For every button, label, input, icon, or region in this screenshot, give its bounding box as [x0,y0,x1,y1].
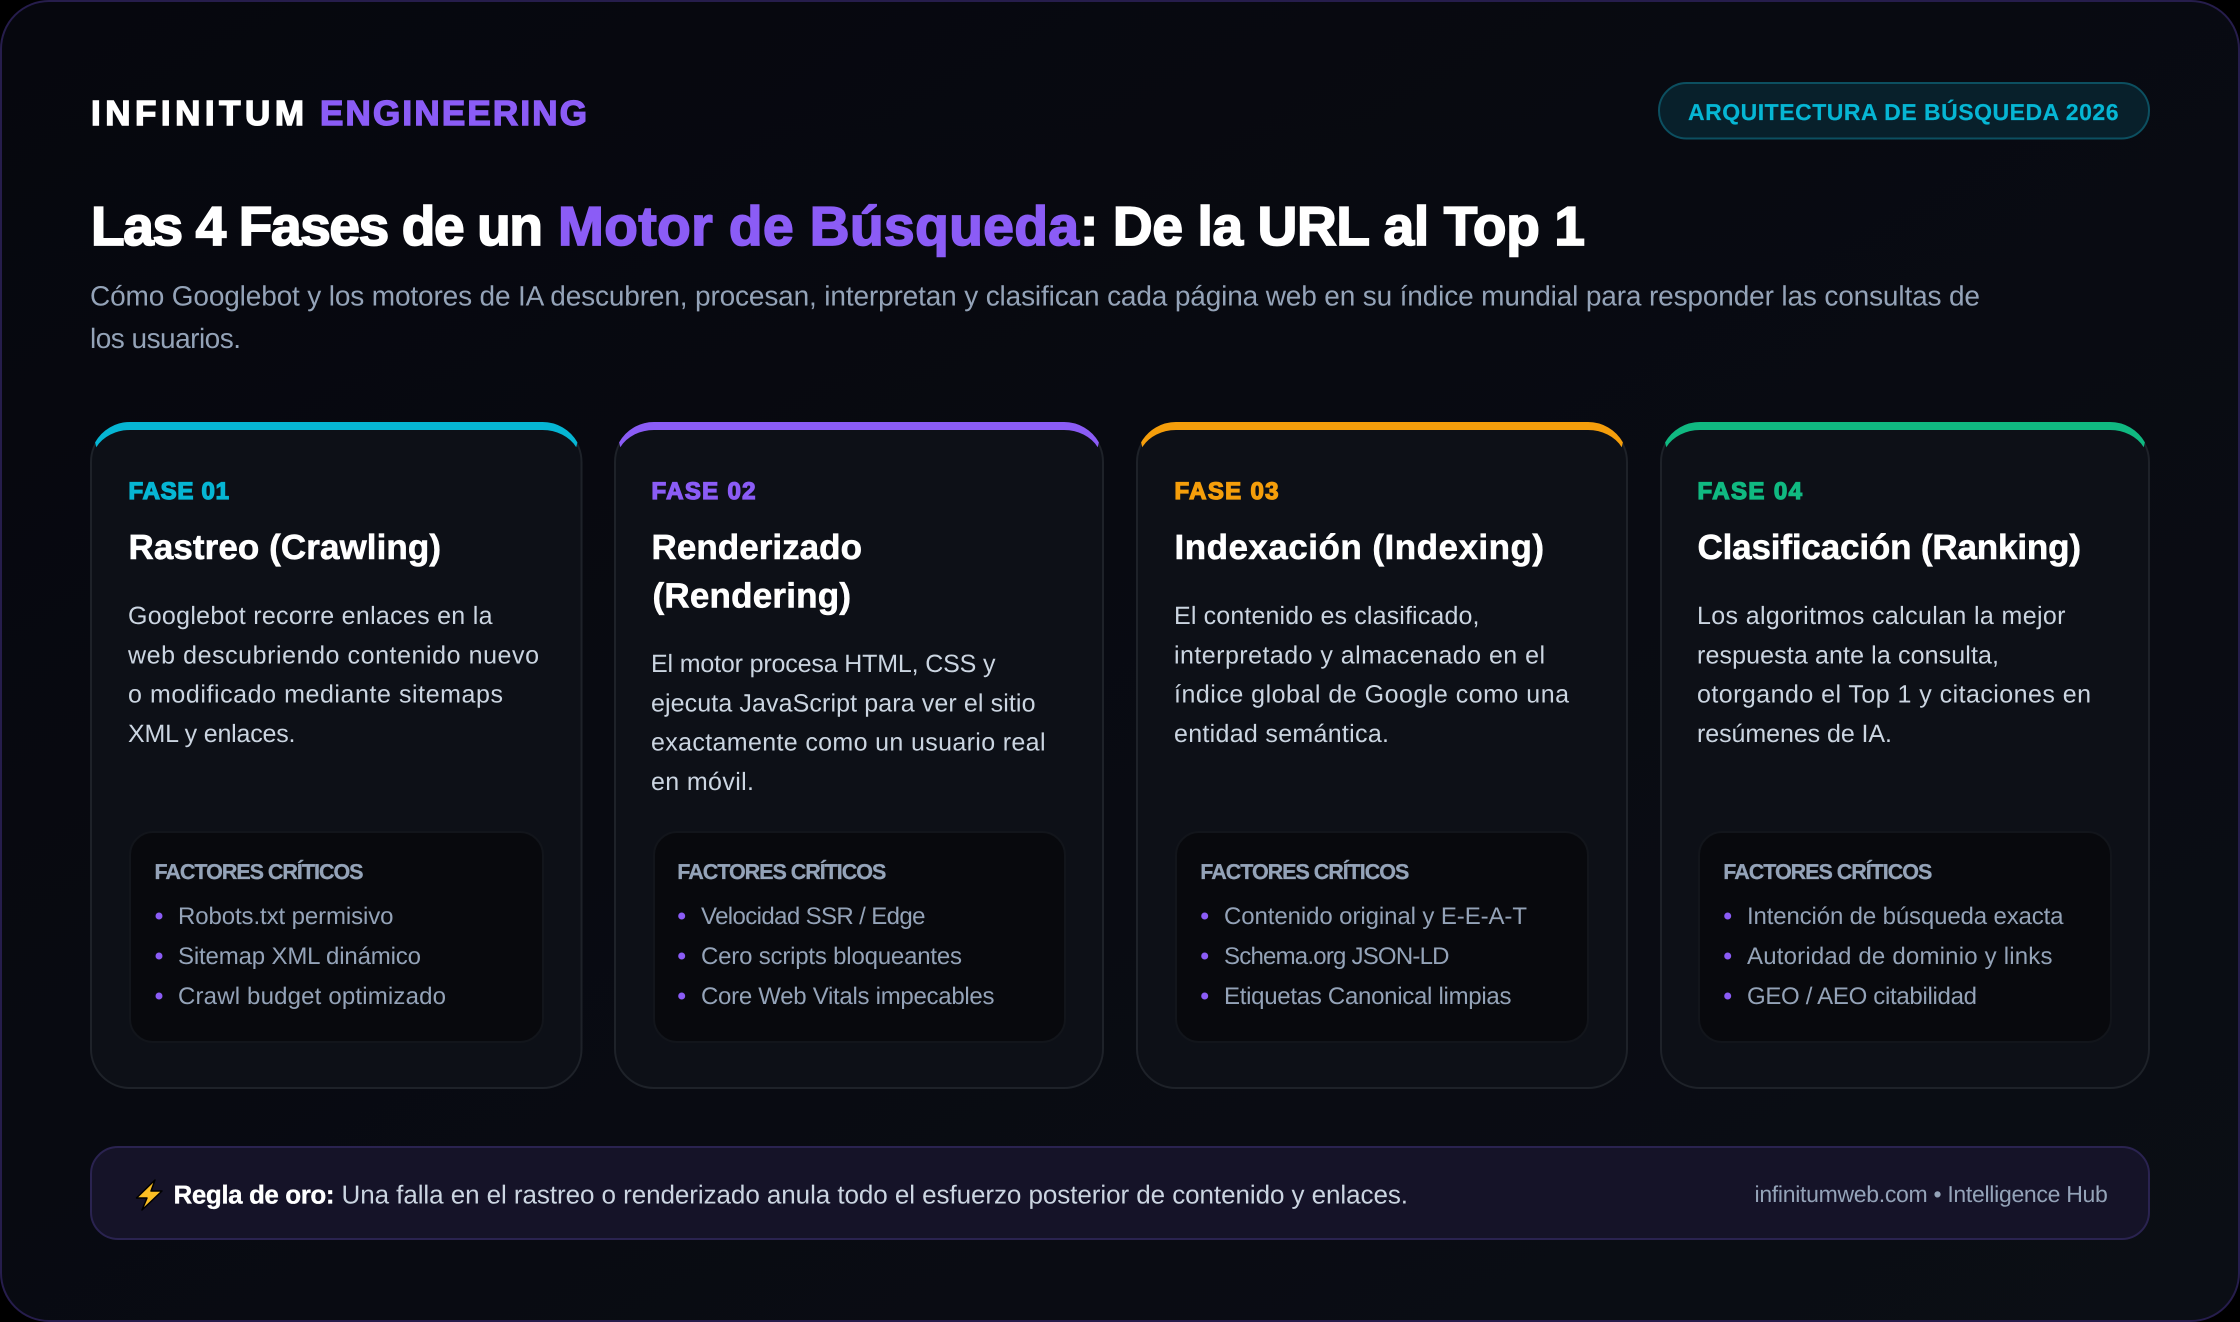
phase label: FASE 03 [1174,478,1281,505]
panel: fase 04 clasificacion [1661,422,2149,1088]
header brand: INFINITUM [91,94,305,133]
critical factors box: Etiquetas Canonical limpias [1224,983,1512,1010]
description: índice global de Google como una [1174,680,1569,708]
critical factors box: Autoridad de dominio y links [1747,943,2052,970]
description: resúmenes de IA. [1697,720,1892,748]
critical factors box: Contenido original y E-E-A-T [1224,903,1527,930]
subtitle [90,280,1980,354]
description: o modificado mediante sitemaps [128,680,503,708]
critical factors box: Intención de búsqueda exacta [1747,903,2064,930]
description: XML y enlaces. [128,720,296,748]
critical factors box [1699,832,2111,1042]
card heading: Indexación (Indexing) [1174,528,1544,567]
description: El motor procesa HTML, CSS y [651,650,996,678]
description: otorgando el Top 1 y citaciones en [1697,680,2091,708]
card heading: Clasificación (Ranking) [1698,528,2081,567]
critical factors box: Cero scripts bloqueantes [701,943,962,970]
critical factors box: FACTORES CRÍTICOS [677,859,886,884]
footer credit: infinitumweb.com • Intelligence Hub [1754,1181,2108,1207]
critical factors box [654,832,1065,1042]
description: ejecuta JavaScript para ver el sitio [651,690,1036,718]
subtitle: los usuarios. [90,323,241,354]
critical factors box: GEO / AEO citabilidad [1747,983,1977,1010]
critical factors box: Schema.org JSON-LD [1224,943,1450,970]
description: Googlebot recorre enlaces en la [128,602,493,630]
card accent bar [1141,422,1623,447]
critical factors box: Robots.txt permisivo [178,903,394,930]
card accent bar [619,422,1099,447]
critical factors box: FACTORES CRÍTICOS [154,859,364,884]
panel: fase 01 rastreo [91,422,582,1088]
golden rule text: Una falla en el rastreo o renderizado anula todo el esfuerzo posterior de contenido y enlaces. [342,1180,1408,1210]
header badge: ARQUITECTURA DE BÚSQUEDA 2026 [1688,99,2120,125]
description: web descubriendo contenido nuevo [127,642,539,670]
card heading: Rastreo (Crawling) [128,528,441,567]
main title [91,195,1585,257]
description: El contenido es clasificado, [1174,602,1480,630]
description: respuesta ante la consulta, [1697,642,1999,670]
phase label: FASE 02 [652,478,758,505]
subtitle: Cómo Googlebot y los motores de IA descubren, procesan, interpretan y clasifican cada página web en su índice mundial para responder las consultas de [90,280,1980,312]
description [1174,602,1569,748]
critical factors box: FACTORES CRÍTICOS [1200,859,1409,884]
description [1697,602,2091,748]
main title: Motor de Búsqueda [558,195,1079,257]
phase label: FASE 04 [1698,478,1804,505]
card heading: (Rendering) [652,576,851,615]
header brand [91,94,588,133]
main title: : De la URL al Top 1 [1080,195,1585,257]
description [651,650,1046,796]
critical factors box [1176,832,1588,1042]
header badge [1659,83,2149,138]
main title: Las 4 Fases de un [91,195,543,257]
card accent bar [1665,422,2145,447]
critical factors box: Velocidad SSR / Edge [701,903,926,930]
footer banner [91,1147,2149,1239]
golden rule text: Regla de oro: [174,1180,334,1210]
phase label: FASE 01 [128,478,232,505]
description: exactamente como un usuario real [651,728,1046,756]
critical factors box: Crawl budget optimizado [178,983,446,1010]
card heading [652,528,862,615]
description: entidad semántica. [1174,720,1389,748]
card heading: Renderizado [652,528,862,567]
panel: fase 03 indexacion [1137,422,1627,1088]
description: Los algoritmos calculan la mejor [1697,602,2066,630]
header brand: ENGINEERING [320,94,588,133]
critical factors box: FACTORES CRÍTICOS [1723,859,1932,884]
critical factors box: Sitemap XML dinámico [178,943,421,970]
description [127,602,539,748]
panel: fase 02 renderizado [615,422,1103,1088]
description: interpretado y almacenado en el [1174,642,1545,670]
icon: lightning bolt [136,1180,162,1210]
critical factors box: Core Web Vitals impecables [701,983,994,1010]
card accent bar [95,422,577,447]
description: en móvil. [651,768,754,796]
critical factors box [130,832,543,1042]
